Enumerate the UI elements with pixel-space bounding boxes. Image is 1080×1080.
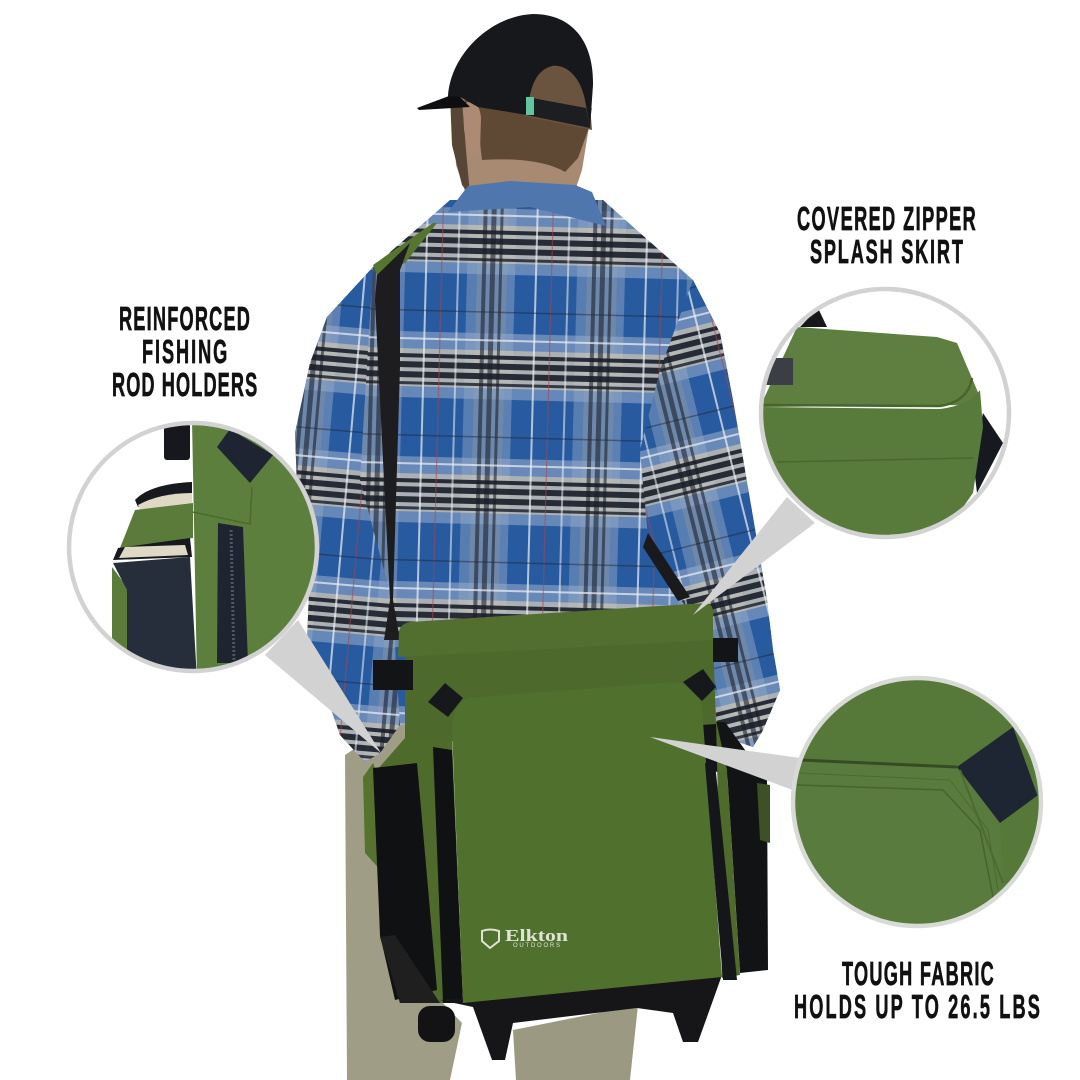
neck and head: [450, 88, 592, 200]
brand logo: Elkton: [505, 926, 569, 945]
shoulder strap: [373, 223, 690, 640]
brand logo: OUTDOORS: [513, 943, 560, 949]
bag lid: [398, 603, 713, 657]
label: tough fabric holds up to 26.5 lbs: HOLDS UP TO 26.5 LBS: [794, 988, 1040, 1025]
label: tough fabric holds up to 26.5 lbs: TOUGH FABRIC: [842, 955, 994, 992]
bag side and back: [363, 720, 770, 1003]
label: tough fabric holds up to 26.5 lbs: [794, 955, 1040, 1025]
label: reinforced fishing rod holders: ROD HOLDERS: [112, 366, 257, 403]
shirt collar: [448, 181, 606, 226]
label: reinforced fishing rod holders: [112, 300, 257, 403]
trousers: [345, 720, 638, 1080]
callout pointer: zipper skirt: [693, 497, 815, 615]
bag body top: [405, 636, 716, 742]
wheels and trolley: [418, 975, 722, 1060]
corner tabs: [428, 669, 716, 717]
label: reinforced fishing rod holders: REINFORCED: [119, 300, 250, 337]
front panel: [452, 682, 722, 1003]
detail circle: tough fabric: [790, 670, 1045, 926]
callout pointer: rod holders: [265, 620, 381, 753]
cap: [417, 14, 593, 130]
man with bag: [295, 14, 780, 1080]
panel right zipper: [705, 763, 737, 980]
detail circle: rod holders: [69, 420, 320, 680]
label: reinforced fishing rod holders: FISHING: [142, 333, 227, 370]
side strap loops: [373, 638, 738, 690]
label: covered zipper splash skirt: [797, 200, 976, 270]
label: covered zipper splash skirt: SPLASH SKIRT: [810, 233, 963, 270]
shirt body and sleeves: [295, 200, 780, 762]
label: covered zipper splash skirt: COVERED ZIPPER: [797, 200, 976, 237]
callout pointer: fabric: [650, 737, 800, 792]
detail circle: covered zipper: [758, 289, 1009, 540]
brand logo: [482, 926, 569, 949]
